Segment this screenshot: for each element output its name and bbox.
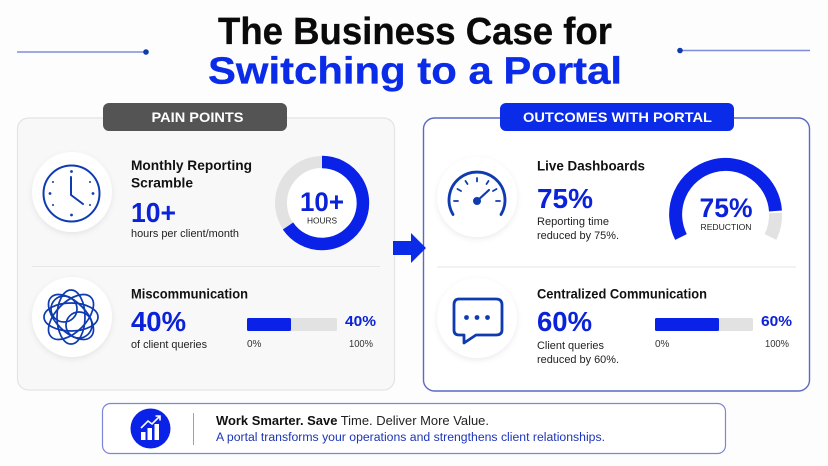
text: miscommunication xyxy=(131,286,248,351)
chart: 75% gauge xyxy=(676,164,776,237)
arrow xyxy=(393,233,426,263)
outcomes badge xyxy=(500,103,734,131)
callout text: Work Smarter. Save Time. Deliver More Value. xyxy=(216,413,489,428)
icon: chat bubble xyxy=(437,278,517,358)
text: monthly reporting scramble: hours per client/month xyxy=(131,228,239,240)
text: centralized communication: Client queries xyxy=(537,340,604,352)
chart: 60% bar xyxy=(655,314,792,350)
title: Switching to a Portal xyxy=(208,50,622,92)
chart: 60% bar: 0% xyxy=(655,339,670,350)
panel: pain points xyxy=(18,103,394,390)
text: monthly reporting scramble xyxy=(131,157,252,240)
callout xyxy=(102,404,726,454)
chart: hours donut: 10+ xyxy=(300,187,344,217)
right header line xyxy=(677,48,810,53)
icon: tangled lines xyxy=(32,277,112,357)
title: The Business Case for xyxy=(218,11,612,53)
chart: 40% bar xyxy=(247,314,376,350)
text: live dashboards: Reporting time xyxy=(537,216,609,228)
panel: outcomes with portal xyxy=(424,103,810,391)
chart: 75% gauge: 75% xyxy=(700,193,752,223)
pain points badge xyxy=(103,103,287,131)
callout text xyxy=(216,413,605,444)
title xyxy=(208,11,622,92)
outcomes badge: OUTCOMES WITH PORTAL xyxy=(523,109,712,125)
icon: growth chart xyxy=(130,408,170,448)
text: live dashboards: reduced by 75%. xyxy=(537,230,619,242)
text: monthly reporting scramble: Scramble xyxy=(131,174,193,190)
text: centralized communication: 60% xyxy=(537,306,592,337)
text: live dashboards xyxy=(537,158,645,242)
text: miscommunication: 40% xyxy=(131,306,186,337)
text: miscommunication: Miscommunication xyxy=(131,286,248,302)
text: monthly reporting scramble: Monthly Reporting xyxy=(131,157,252,173)
icon: clock xyxy=(32,152,112,232)
chart: 40% bar: 40% xyxy=(345,314,376,330)
callout text: A portal transforms your operations and strengthens client relationships. xyxy=(216,432,605,444)
icon: gauge xyxy=(437,157,517,237)
chart: 60% bar: 100% xyxy=(765,339,789,350)
text: monthly reporting scramble: 10+ xyxy=(131,197,176,228)
text: centralized communication: Centralized Communication xyxy=(537,286,707,302)
chart: 40% bar: 100% xyxy=(349,339,373,350)
left header line xyxy=(17,49,149,55)
chart: 75% gauge: REDUCTION xyxy=(700,222,752,232)
text: centralized communication: reduced by 60%. xyxy=(537,354,619,366)
text: live dashboards: Live Dashboards xyxy=(537,158,645,174)
text: live dashboards: 75% xyxy=(537,183,593,214)
pain points badge: PAIN POINTS xyxy=(152,109,244,125)
text: miscommunication: of client queries xyxy=(131,339,207,351)
chart: hours donut xyxy=(281,162,363,244)
chart: 60% bar: 60% xyxy=(761,314,792,330)
chart: hours donut: HOURS xyxy=(307,216,337,226)
text: centralized communication xyxy=(537,286,707,366)
chart: 40% bar: 0% xyxy=(247,339,262,350)
